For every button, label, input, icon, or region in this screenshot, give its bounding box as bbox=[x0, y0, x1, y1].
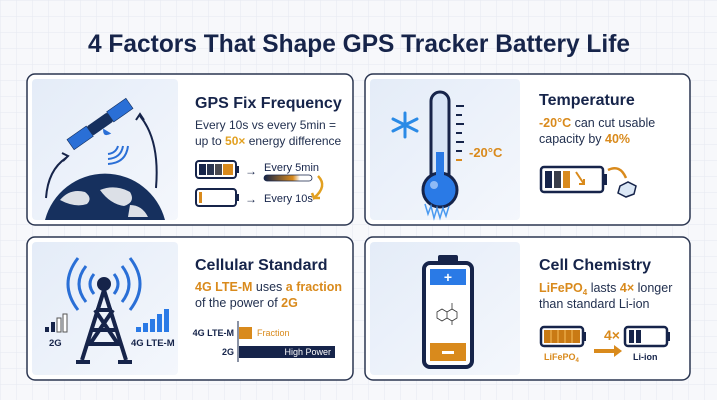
bar chart: 2G bbox=[222, 347, 234, 357]
heading: Cellular Standard bbox=[195, 257, 327, 274]
icon: 4G bars bbox=[136, 309, 169, 332]
icon: big battery: + bbox=[444, 269, 452, 285]
icon: tower bbox=[76, 279, 132, 362]
panel: cellular standard: 2G bbox=[49, 338, 62, 349]
icon: big battery bbox=[424, 255, 472, 367]
panel: temperature: -20°C bbox=[469, 145, 503, 160]
bar chart: 4G LTE-M bbox=[193, 328, 234, 338]
bar chart: High Power bbox=[284, 347, 331, 357]
icon: signal waves bbox=[108, 146, 128, 164]
text block: 4× longer bbox=[620, 281, 672, 295]
icon: LiFePO4 battery bbox=[541, 327, 586, 346]
panel: cell chemistry: Li-ion bbox=[633, 352, 658, 362]
heading: GPS Fix Frequency bbox=[195, 95, 342, 112]
arrow: 4x bbox=[594, 327, 622, 357]
icon: Li-ion battery bbox=[625, 327, 670, 346]
panel: GPS fix frequency: up to 50× energy difference bbox=[195, 134, 342, 148]
bar chart: Fraction bbox=[257, 328, 290, 338]
panel: cell chemistry: than standard Li-ion bbox=[539, 297, 650, 311]
panel: temperature: capacity by 40% bbox=[539, 132, 630, 146]
panel: cell chemistry bbox=[365, 237, 690, 380]
heading: Cell Chemistry bbox=[539, 257, 651, 274]
panel: cell chemistry: 4 bbox=[576, 358, 580, 364]
icon: snowflake bbox=[393, 113, 417, 137]
panel: GPS fix frequency: Every 10s bbox=[264, 193, 313, 205]
arrows bbox=[46, 114, 157, 198]
bar chart bbox=[193, 321, 335, 362]
icon: satellite bbox=[67, 98, 138, 156]
panel: GPS fix frequency bbox=[27, 74, 353, 225]
icon: 2G signal bars bbox=[45, 314, 67, 332]
panel: GPS fix frequency: → bbox=[245, 192, 257, 206]
panel: GPS fix frequency: Every 5min bbox=[264, 162, 319, 174]
panel: temperature bbox=[365, 74, 690, 225]
panel: cellular standard: 4G LTE-M bbox=[131, 338, 175, 349]
title: 4 Factors That Shape GPS Tracker Battery Life bbox=[88, 30, 630, 58]
arrow: orange curve bbox=[312, 176, 322, 198]
icon: battery losing capacity bbox=[541, 167, 607, 192]
battery full bbox=[196, 161, 239, 178]
text block: 4G LTE-M uses a fraction bbox=[195, 280, 342, 294]
text block: Every 10s vs every 5min = bbox=[195, 118, 336, 132]
panel: cellular standard bbox=[27, 237, 353, 380]
icon: globe bbox=[45, 174, 165, 220]
heading: Temperature bbox=[539, 92, 635, 109]
text block: LiFePO bbox=[539, 281, 588, 297]
panel: cellular standard: of the power of 2G bbox=[195, 296, 298, 310]
panel: cell chemistry: LiFePO bbox=[544, 352, 576, 362]
icon: thermometer bbox=[423, 92, 457, 218]
text block: -20°C can cut usable bbox=[539, 116, 655, 130]
panel: GPS fix frequency: → bbox=[245, 164, 257, 178]
text block: lasts bbox=[587, 281, 620, 295]
arrow: 4x: 4× bbox=[604, 327, 620, 343]
battery low bbox=[196, 189, 239, 206]
text block: 4 bbox=[583, 288, 588, 297]
